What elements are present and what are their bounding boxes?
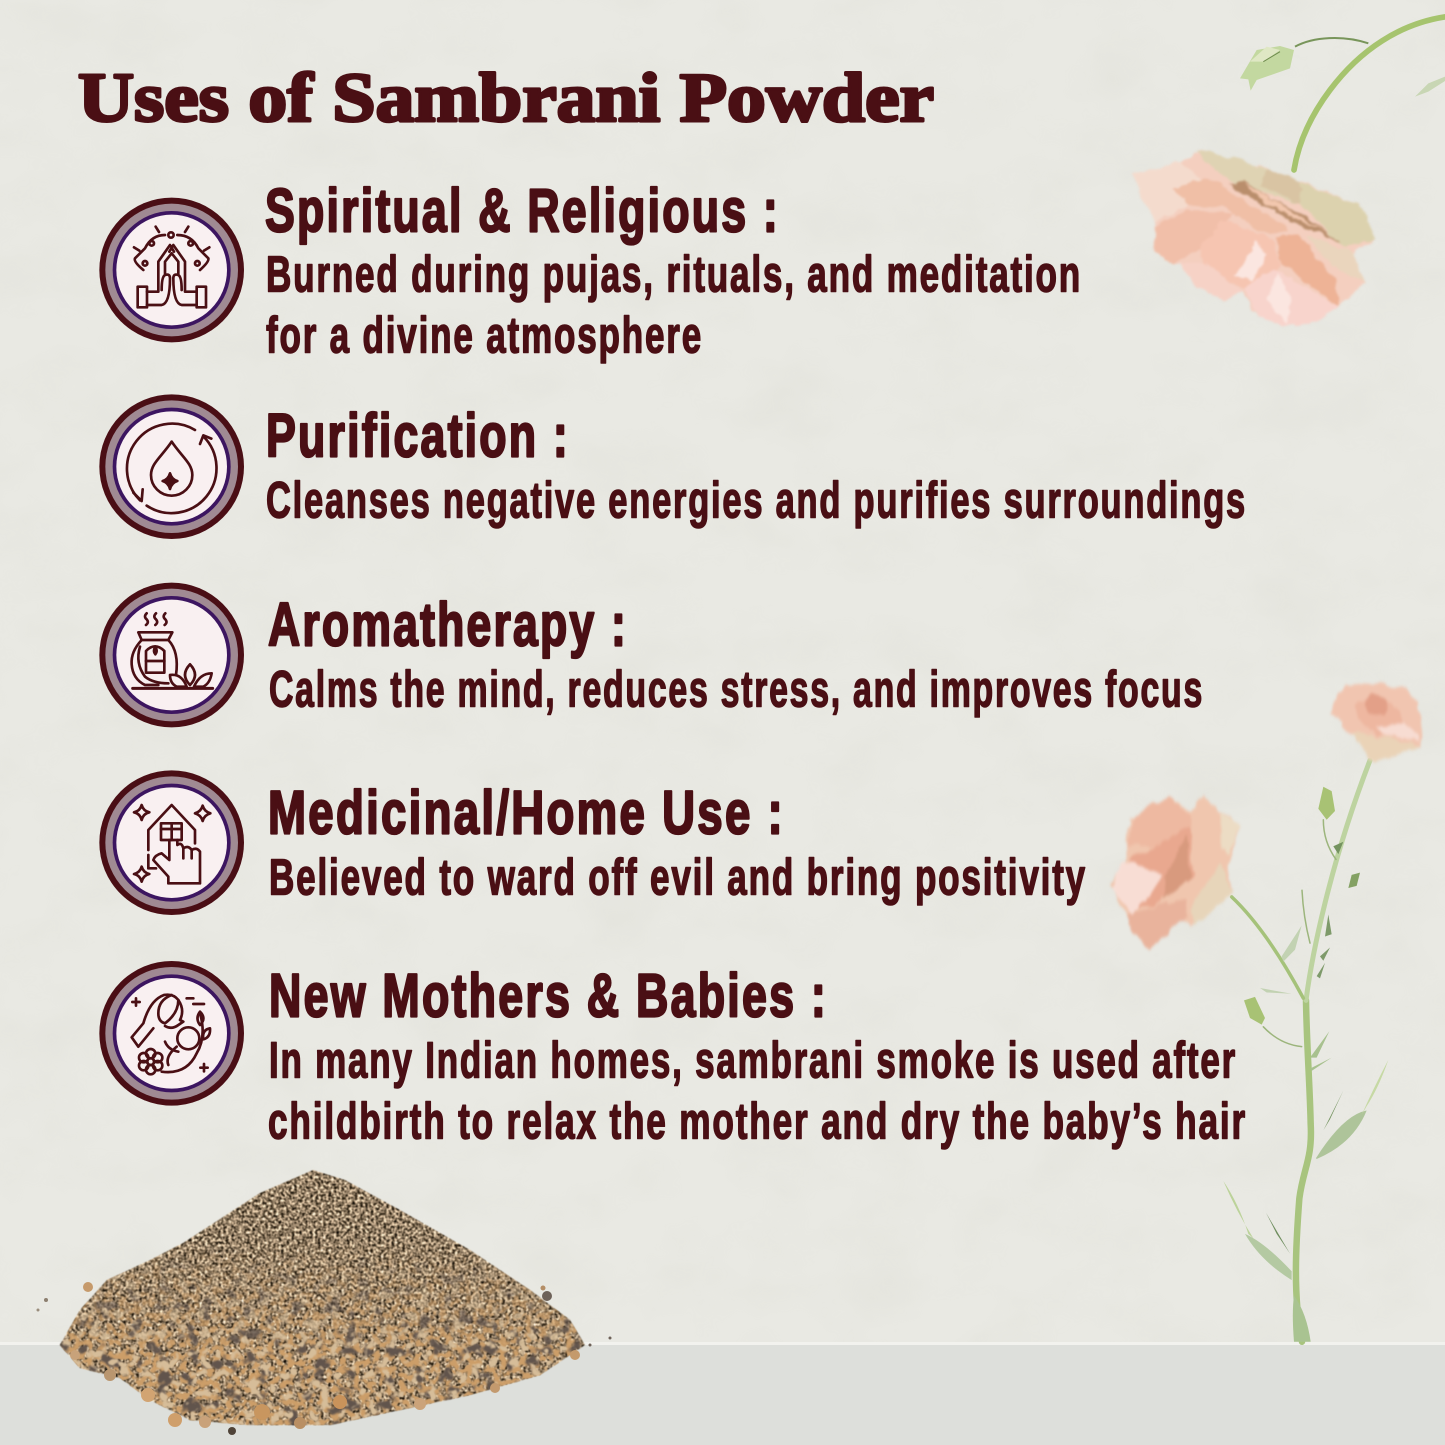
icon: mother holding baby — [99, 961, 244, 1106]
description: Burned during pujas, rituals, and meditation — [266, 246, 1082, 302]
floor ledge — [0, 1342, 1445, 1445]
panel: aromatherapy — [99, 583, 1204, 727]
coarse lower granules — [59, 1246, 582, 1426]
title: Uses of Sambrani Powder — [78, 60, 934, 137]
heading: Spiritual & Religious : — [265, 176, 780, 244]
illustration: top hanging flower — [1133, 17, 1445, 327]
heading: Medicinal/Home Use : — [268, 778, 785, 846]
icon: home with pointing hand — [99, 770, 244, 915]
icon: praying hands — [99, 198, 244, 342]
loose grains — [36, 1282, 612, 1435]
right flower — [1332, 683, 1422, 760]
description — [266, 246, 1082, 364]
pile body — [60, 1170, 585, 1425]
plant leaves — [1223, 787, 1388, 1342]
panel: medicinal and home use — [99, 770, 1087, 915]
illustration: sambrani powder pile — [36, 1170, 612, 1435]
plant stems — [1232, 760, 1370, 1342]
illustration: flowering plant on the right — [1110, 683, 1422, 1342]
panel: purification — [99, 394, 1247, 539]
heading: Aromatherapy : — [268, 590, 628, 658]
panel: spiritual and religious — [99, 176, 1082, 364]
panel: new mothers and babies — [99, 961, 1247, 1150]
flower stem — [1294, 17, 1445, 170]
description: for a divine atmosphere — [266, 306, 703, 364]
icon: oil burner with leaves — [99, 583, 244, 727]
left flower — [1110, 796, 1240, 950]
description — [268, 1032, 1247, 1150]
icon: water drop with cycle arrows — [99, 394, 244, 539]
description: Believed to ward off evil and bring positivity — [269, 848, 1087, 906]
heading: Purification : — [266, 402, 570, 470]
heading: New Mothers & Babies : — [269, 962, 828, 1030]
